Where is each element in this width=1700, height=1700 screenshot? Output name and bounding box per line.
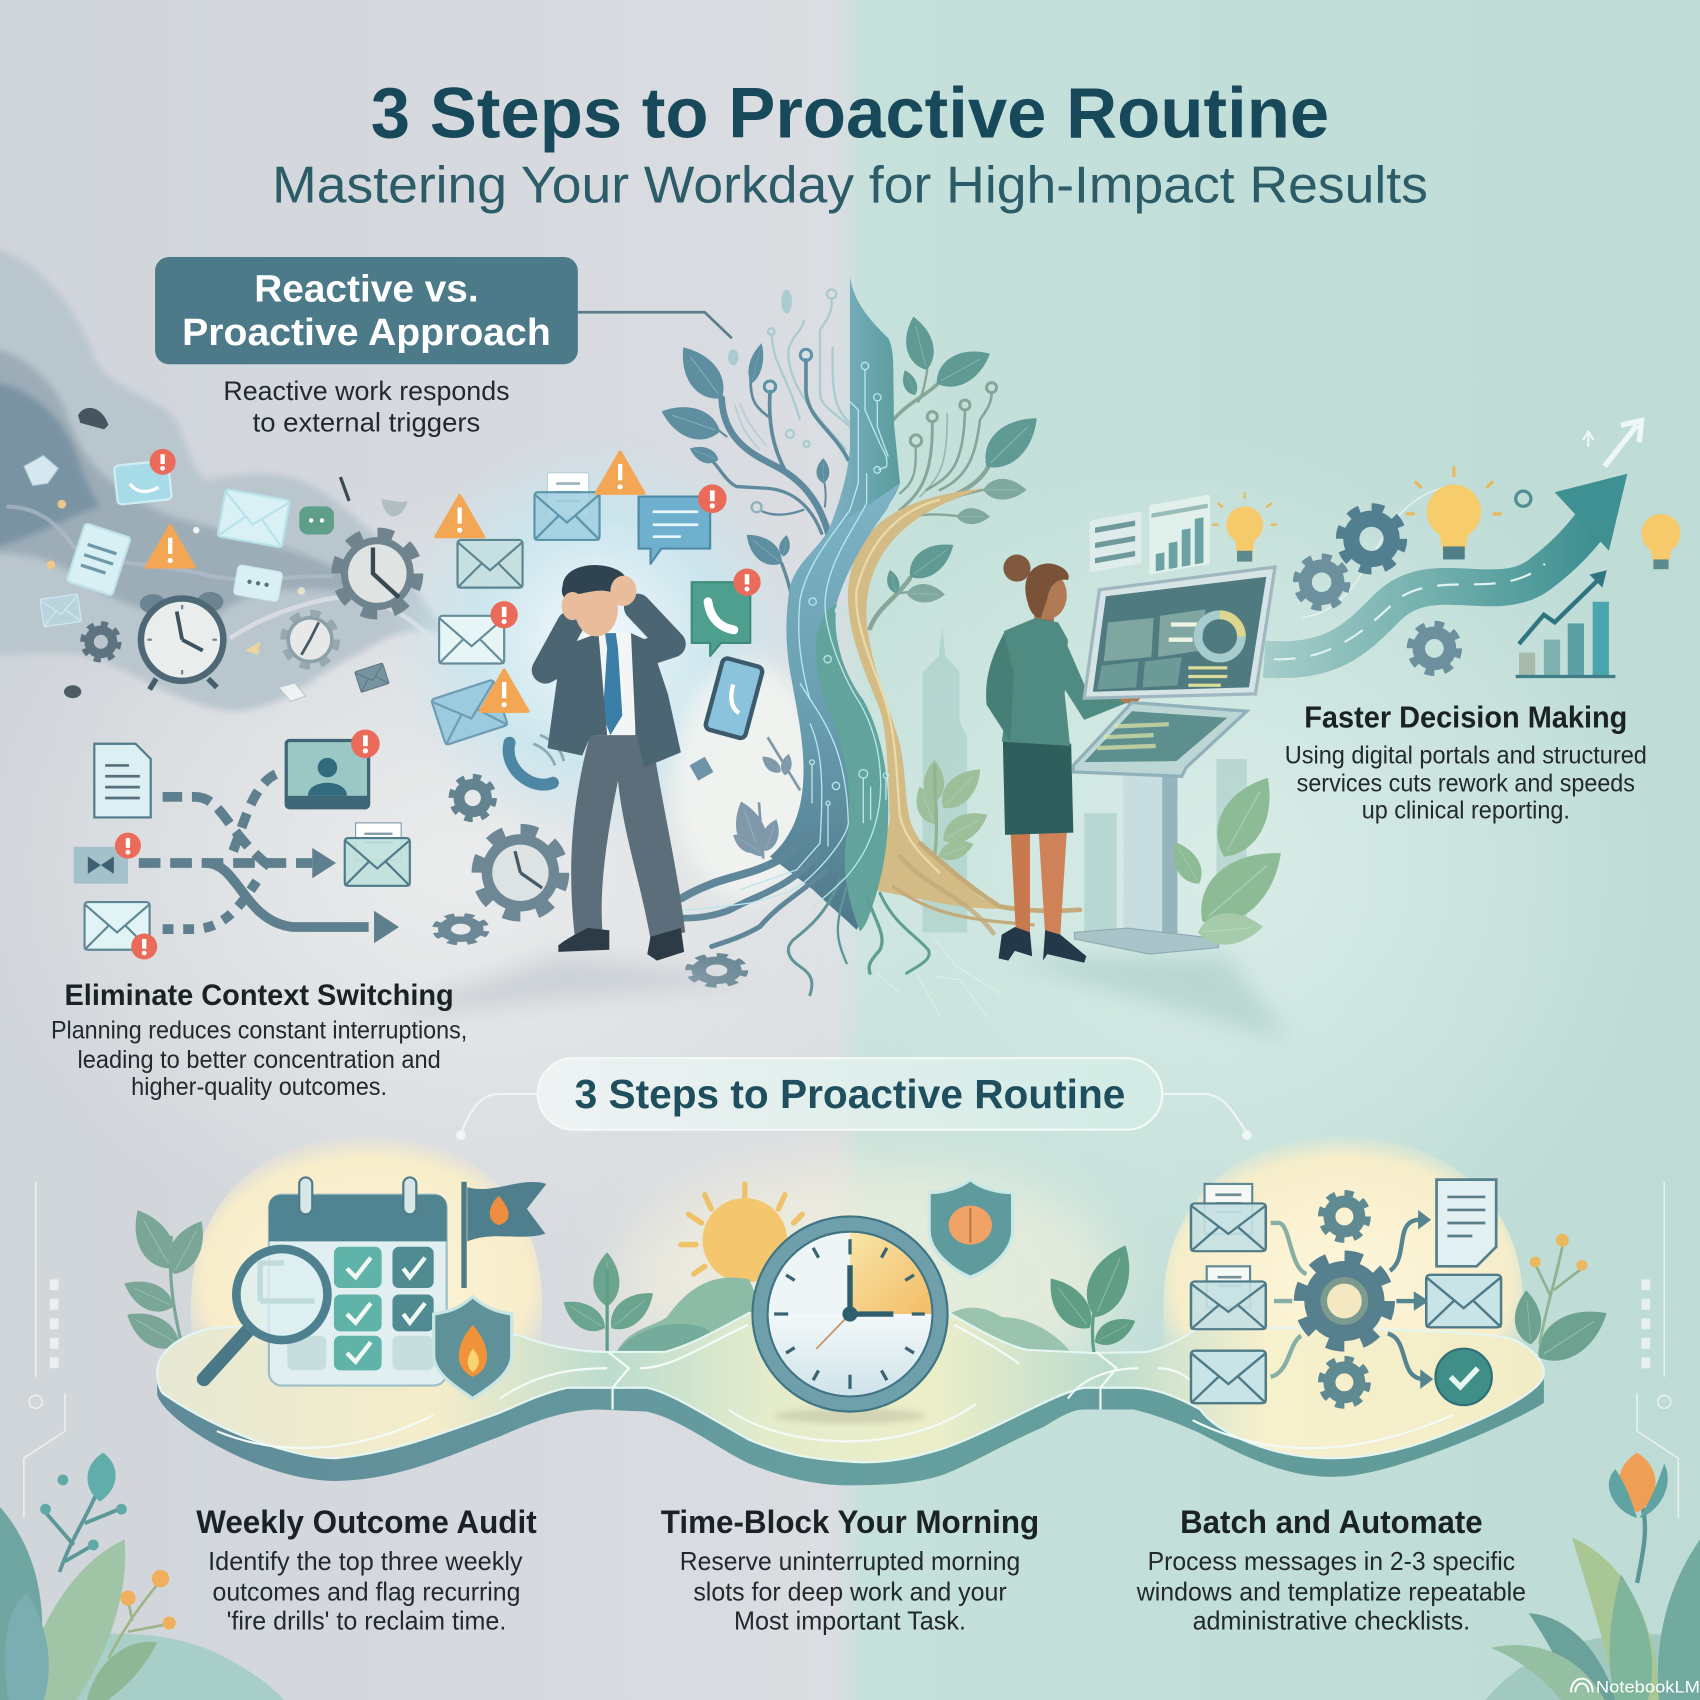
step 3 text: windows and templatize repeatable: [1136, 1576, 1526, 1606]
subtitle: Mastering Your Workday for High-Impact Results: [272, 157, 1428, 215]
gold half of the trunk: [848, 488, 1017, 909]
text: faster decision making: up clinical reporting.: [1362, 797, 1570, 825]
green mid trunk strand: [816, 603, 888, 932]
text: eliminate context switching: leading to better concentration and: [78, 1046, 441, 1074]
ground shadows: [369, 954, 1290, 1041]
callout: reactive vs proactive: Proactive Approach: [182, 312, 551, 354]
callout connector: [578, 312, 732, 338]
step 1 text: outcomes and flag recurring: [212, 1576, 520, 1606]
chaos icons: left stream: [24, 408, 417, 701]
step 1 text: Identify the top three weekly: [208, 1546, 523, 1576]
small plants beside the trunk: [727, 737, 993, 864]
side circuit decorations: [24, 1182, 1678, 1518]
gold trunk highlights: [856, 500, 940, 873]
step 2 text: Time-Block Your Morning: [661, 1504, 1039, 1540]
growth ribbon arrow: [1264, 421, 1641, 660]
callout caption: Reactive work responds: [223, 375, 510, 406]
text: faster decision making: Faster Decision Making: [1304, 701, 1627, 734]
step 1 text: 'fire drills' to reclaim time.: [227, 1606, 506, 1636]
roots: [682, 837, 1080, 995]
kiosk with dashboard: [1073, 567, 1275, 954]
text: eliminate context switching: higher-quality outcomes.: [131, 1073, 387, 1101]
step 3 text: Process messages in 2-3 specific: [1148, 1546, 1515, 1576]
step 2 text: [661, 1504, 1039, 1636]
distant city skyline: [923, 627, 1247, 932]
glow around reactive worker: [390, 434, 802, 846]
step 2 icon: time-block clock: [752, 1180, 1013, 1424]
sun over hills: [616, 1160, 1117, 1399]
step 2 text: slots for deep work and your: [693, 1576, 1007, 1606]
circuit traces: [683, 362, 889, 910]
text: eliminate context switching: [51, 980, 467, 1101]
section pill heading: 3 Steps to Proactive Routine: [575, 1071, 1125, 1117]
callout: reactive vs proactive: [155, 257, 578, 364]
step 3 text: Batch and Automate: [1180, 1504, 1483, 1540]
gears and light bulbs: [1212, 466, 1680, 672]
step 1 text: Weekly Outcome Audit: [196, 1504, 537, 1540]
wavy platform: [157, 1313, 1544, 1485]
plants behind the platform: [118, 1203, 1617, 1373]
step 3 icon: batch and automate: [1191, 1180, 1501, 1405]
figure: stressed reactive worker: [545, 565, 685, 961]
step 1 text: [196, 1504, 537, 1636]
text: faster decision making: [1285, 701, 1647, 825]
foliage near kiosk: [1165, 767, 1296, 947]
callout caption: to external triggers: [253, 407, 480, 438]
text: eliminate context switching: Planning reduces constant interruptions,: [51, 1017, 467, 1045]
context switching flow diagram: [74, 729, 410, 960]
right branches: [870, 370, 992, 628]
step 3 text: administrative checklists.: [1193, 1606, 1470, 1636]
text: faster decision making: services cuts rework and speeds: [1297, 769, 1635, 797]
NotebookLM watermark: NotebookLM: [1596, 1677, 1700, 1696]
figure: focused proactive worker: [986, 555, 1141, 963]
callout caption: [223, 375, 510, 438]
left branches: [707, 360, 848, 607]
corner foliage: bottom right: [1485, 1453, 1700, 1700]
floating charts panel: [1090, 495, 1210, 575]
rising bar chart: [1516, 570, 1615, 677]
step 1 icon: calendar audit: [204, 1177, 546, 1399]
text: faster decision making: Using digital portals and structured: [1285, 741, 1647, 769]
tree: half circuit, half organic: [657, 277, 1080, 1017]
corner foliage: bottom left: [0, 1453, 284, 1700]
section pill heading: [538, 1058, 1162, 1130]
chaos icons: around the worker: [431, 452, 763, 985]
text: eliminate context switching: Eliminate Context Switching: [65, 980, 454, 1012]
callout: reactive vs proactive: Reactive vs.: [254, 268, 479, 310]
teal crown: [827, 277, 900, 535]
blue lower trunk: [770, 483, 900, 930]
step 2 text: Most important Task.: [734, 1606, 966, 1636]
step 3 text: [1136, 1504, 1526, 1636]
bright haze between worker and tree: [672, 661, 824, 900]
step 2 text: Reserve uninterrupted morning: [680, 1546, 1020, 1576]
faded circuit branches: [768, 289, 853, 450]
title: 3 Steps to Proactive Routine: [371, 74, 1329, 154]
pill connectors: [457, 1094, 1251, 1139]
glowing arches behind step icons: [191, 1136, 1523, 1399]
smoke swirl: chaos background: [0, 250, 443, 711]
